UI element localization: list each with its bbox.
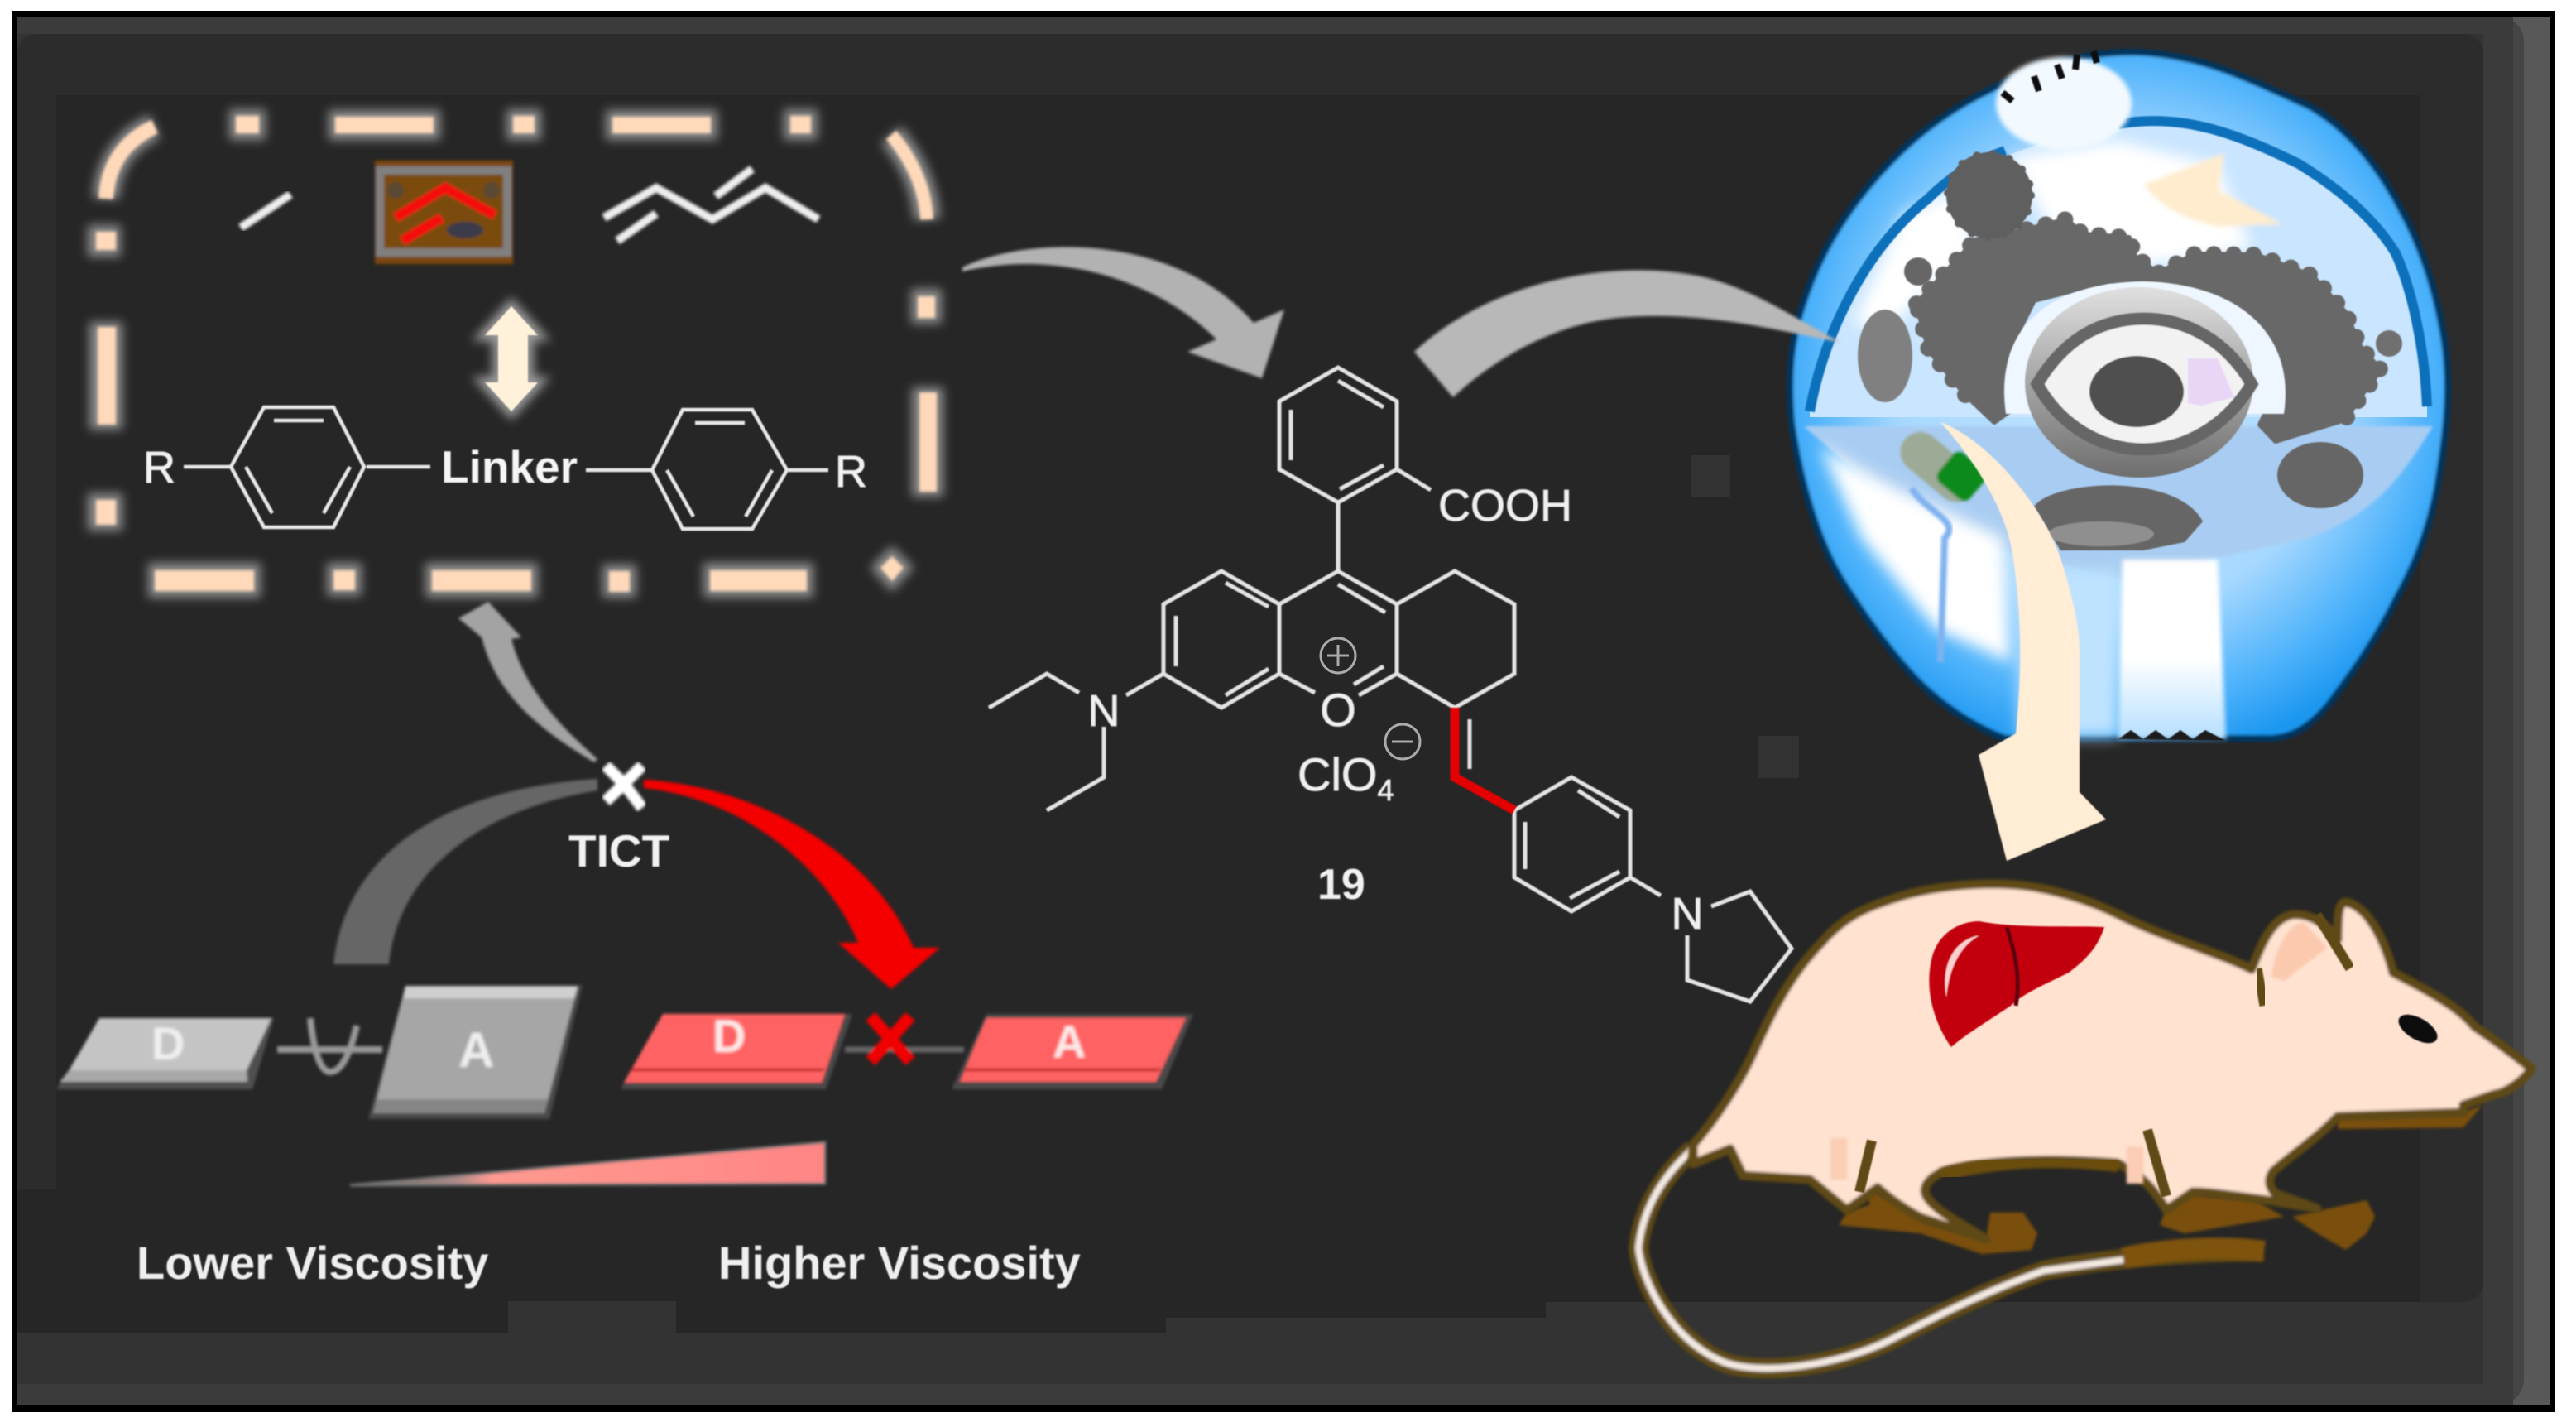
label: Linker: Linker: [441, 441, 578, 492]
peach organelle: [2144, 153, 2283, 227]
column teeth: [2118, 730, 2226, 741]
pore teeth: [2003, 51, 2097, 101]
belly shadow: [1940, 1161, 2118, 1175]
label: oxygen: O: [1320, 684, 1356, 736]
viscosity wedge: [350, 1142, 825, 1185]
donor red: [621, 1010, 852, 1089]
planar donor-acceptor: [621, 1010, 1193, 1089]
bis-phenyl linker structure: [184, 407, 828, 529]
label: R right: R: [835, 447, 867, 497]
dome fill: [1810, 118, 2427, 417]
cell equator line: [1796, 412, 2438, 425]
white cytoplasm patches: [1854, 141, 2251, 331]
bond: [845, 1046, 964, 1053]
acceptor red: [952, 1014, 1193, 1089]
icon: mouse: [1638, 884, 2531, 1368]
white fan: [1820, 447, 2011, 662]
compound 19 structure: [989, 368, 1792, 1002]
twisted bond: [277, 1018, 382, 1072]
ear inner: [2271, 923, 2327, 981]
red vinyl bond: [1455, 708, 1514, 810]
arrow: double-headed: [485, 306, 538, 411]
lower sector shading: [1804, 426, 2433, 579]
feet: [1839, 1105, 2482, 1254]
donor grey: [56, 1017, 274, 1089]
cell body: [1790, 52, 2448, 738]
label: TICT: TICT: [568, 825, 669, 877]
icon: positive charge: [1321, 638, 1355, 673]
nucleus: [2004, 281, 2286, 478]
label: pyrrolidine N: N: [1672, 889, 1703, 939]
tail: [1638, 1149, 2264, 1368]
arrow: linker to compound: [962, 247, 1284, 378]
label: diethylamine N: N: [1087, 686, 1120, 736]
cell dome line: [1810, 121, 2427, 411]
acceptor grey: [368, 985, 583, 1119]
leg creases: [1859, 1130, 2166, 1196]
icon: negative charge: [1385, 724, 1420, 759]
pore blur: [1996, 57, 2132, 150]
dashed frame glow: [93, 114, 938, 593]
donor red: D: [712, 1010, 746, 1062]
neck crease: [2257, 968, 2264, 1006]
label: R left: R: [143, 443, 175, 492]
label: higher viscosity: Higher Viscosity: [718, 1237, 1081, 1289]
icon: TICT cross: [606, 766, 642, 808]
icon: red cross: [871, 1016, 910, 1061]
leg pink streaks: [1830, 1138, 2143, 1184]
icon: red chevron box: [375, 161, 513, 264]
label: compound number: 19: [1317, 861, 1365, 909]
donor grey: D: [151, 1017, 185, 1069]
label: perchlorate: 4: [1377, 773, 1394, 807]
icon: polyene zigzag: [604, 169, 818, 241]
liver: [1929, 921, 2104, 1047]
icon: single bond: [241, 195, 290, 228]
arrow: compound to cell: [1414, 270, 1841, 397]
ear fold: [2317, 915, 2350, 968]
golgi: [2034, 485, 2203, 550]
label: perchlorate: ClO: [1298, 748, 1377, 800]
arrow: dark grey from lower viscosity to TICT: [333, 779, 597, 964]
eye: [2394, 1009, 2442, 1049]
panel: linker design frame: [93, 114, 938, 593]
mouse body: [1693, 884, 2531, 1239]
pale lower band: [2019, 571, 2118, 737]
acceptor grey: A: [458, 1022, 494, 1078]
arrow: red to higher viscosity: [644, 780, 940, 989]
vesicle tube: [1912, 488, 1949, 662]
dashed frame segments: [96, 116, 937, 592]
endoplasmic reticulum: [1916, 219, 2381, 441]
icon: cell: [1790, 51, 2448, 741]
arrow: cell to mouse: [1940, 422, 2106, 861]
twisted donor-acceptor: [56, 985, 583, 1119]
mitochondrion: [1892, 424, 1989, 510]
label: lower viscosity: Lower Viscosity: [137, 1237, 488, 1289]
organelle blobs: [1858, 152, 2402, 508]
arrow: TICT up to linker frame: [458, 602, 597, 762]
label: COOH: COOH: [1438, 481, 1572, 531]
white column: [2118, 560, 2226, 739]
acceptor red: A: [1053, 1016, 1086, 1068]
